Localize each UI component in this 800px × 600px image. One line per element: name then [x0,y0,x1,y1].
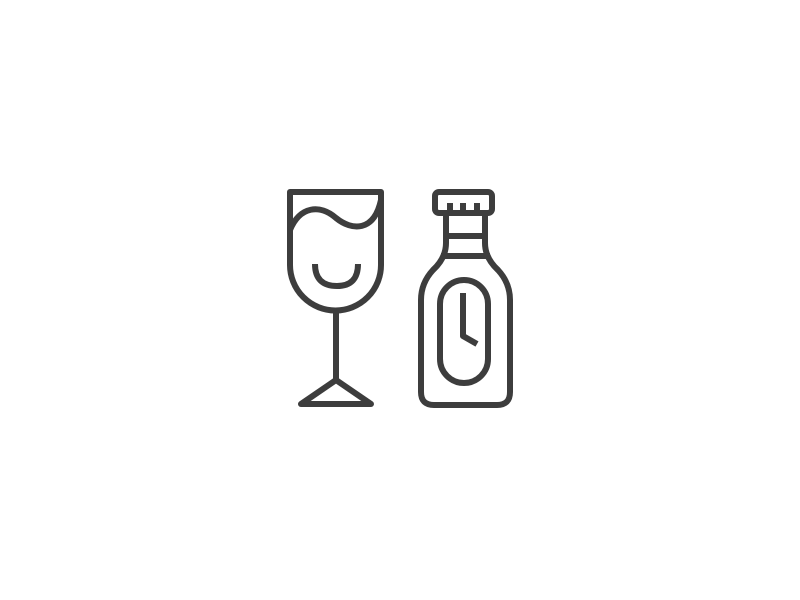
icon: wine glass [290,192,381,404]
icon: bottle with clock [421,192,510,405]
